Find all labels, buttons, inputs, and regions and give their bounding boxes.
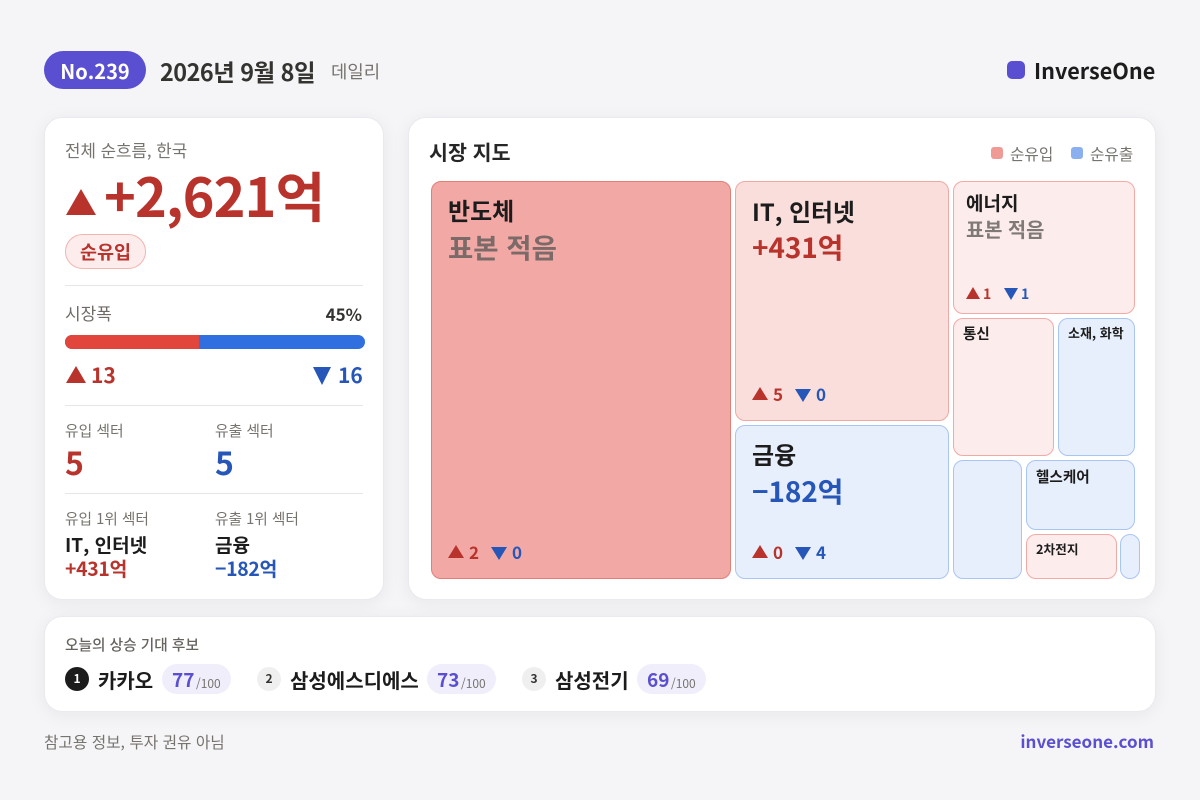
label: inflow sectors: 유입 섹터 [65,420,124,441]
rank 2: 2 [265,670,273,687]
treemap cell: IT internet [735,181,949,421]
rank 1: 1 [73,670,81,687]
header: issue badge [44,51,146,89]
score max: /100 [671,675,696,692]
header: issue badge: No.239 [60,56,130,85]
sector name: 헬스케어 [1036,466,1090,487]
up marker [752,545,768,558]
icon: decliners triangle [313,367,331,385]
score pill [162,664,231,694]
legend [991,142,1133,165]
sector value: +431억 [752,227,843,267]
down count: 4 [816,539,826,564]
label: market breadth: 시장폭 [65,300,112,325]
label: total flow: 전체 순흐름, 한국 [65,138,187,162]
down count: 1 [1021,284,1029,304]
rank 2 [257,667,281,691]
down count: 0 [512,539,522,564]
breadth bar [65,335,365,349]
up marker [966,287,980,299]
score max: /100 [461,675,486,692]
treemap cell: materials chemicals [1058,318,1135,456]
sector name: 반도체 [448,192,514,227]
sector name: IT, 인터넷 [752,193,855,228]
header: date: 2026년 9월 8일 [160,54,315,88]
panel: candidates [44,616,1156,712]
down count: 0 [816,381,826,406]
down marker [795,389,811,402]
top outflow sector value: −182억 [215,553,277,582]
score: 69 [647,666,669,693]
down marker [491,547,507,560]
sector value: 표본 적음 [966,214,1044,243]
name: 삼성전기 [555,665,629,694]
treemap cell: telecom [953,318,1054,456]
name: 삼성에스디에스 [290,665,419,694]
score max: /100 [196,675,221,692]
name: 카카오 [98,665,153,694]
panel: total flow [44,117,384,600]
outflow sector count: 5 [215,439,234,485]
brand logo [1007,55,1155,86]
treemap cell: finance [735,425,949,579]
treemap cell: tiny outflow [1120,534,1140,579]
footer disclaimer: 참고용 정보, 투자 권유 아님 [44,730,225,753]
treemap cell: energy [953,181,1135,314]
label: top inflow sector: 유입 1위 섹터 [65,508,149,529]
treemap cell: healthcare [1026,460,1135,530]
brand name: InverseOne [1034,55,1155,86]
up count: 5 [773,381,783,406]
sector value: 표본 적음 [448,226,557,266]
header: edition: 데일리 [331,58,380,84]
total flow value: +2,621억 [104,154,324,233]
up count: 2 [469,539,479,564]
panel: market map [408,117,1156,600]
inflow sector count: 5 [65,439,84,485]
net inflow badge: 순유입 [80,239,131,265]
up count: 0 [773,539,783,564]
sector name: 통신 [963,323,990,344]
score pill [637,664,706,694]
icon: brand square [1007,61,1025,79]
legend label outflow: 순유출 [1090,142,1133,165]
treemap cell: unlabeled outflow [953,460,1022,579]
advancers count: 13 [91,360,116,390]
up count: 1 [983,284,991,304]
score: 73 [437,666,459,693]
candidate 2 [257,664,496,694]
candidate 3 [522,664,706,694]
treemap cell: secondary battery [1026,534,1117,579]
advancing share [65,335,199,349]
up marker [752,387,768,400]
decliners count: 16 [338,360,363,390]
treemap cell: semiconductors [431,181,731,579]
score: 77 [172,666,194,693]
market breadth value: 45% [326,301,362,326]
rank 3 [522,667,546,691]
top inflow sector name: IT, 인터넷 [65,531,147,558]
down marker [1004,288,1018,300]
rank 1 [65,667,89,691]
up marker [448,545,464,558]
icon: advancers triangle [66,366,86,383]
label: top outflow sector: 유출 1위 섹터 [215,508,299,529]
candidates heading: 오늘의 상승 기대 후보 [65,634,199,655]
footer site: inverseone.com [1020,728,1154,753]
score pill [427,664,496,694]
top outflow sector name: 금융 [215,531,250,558]
icon: big up triangle [66,189,96,215]
legend swatch inflow [991,147,1003,159]
sector value: −182억 [752,471,843,511]
legend swatch outflow [1071,147,1083,159]
candidate 1 [65,664,231,694]
sector name: 2차전지 [1036,539,1079,558]
top inflow sector value: +431억 [65,553,127,582]
sector name: 에너지 [966,189,1018,216]
sector name: 금융 [752,436,796,471]
rank 3: 3 [530,670,538,687]
label: outflow sectors: 유출 섹터 [215,420,274,441]
down marker [795,547,811,560]
net inflow badge [65,234,146,269]
market map title: 시장 지도 [429,136,511,166]
legend label inflow: 순유입 [1010,142,1053,165]
sector name: 소재, 화학 [1068,323,1124,342]
